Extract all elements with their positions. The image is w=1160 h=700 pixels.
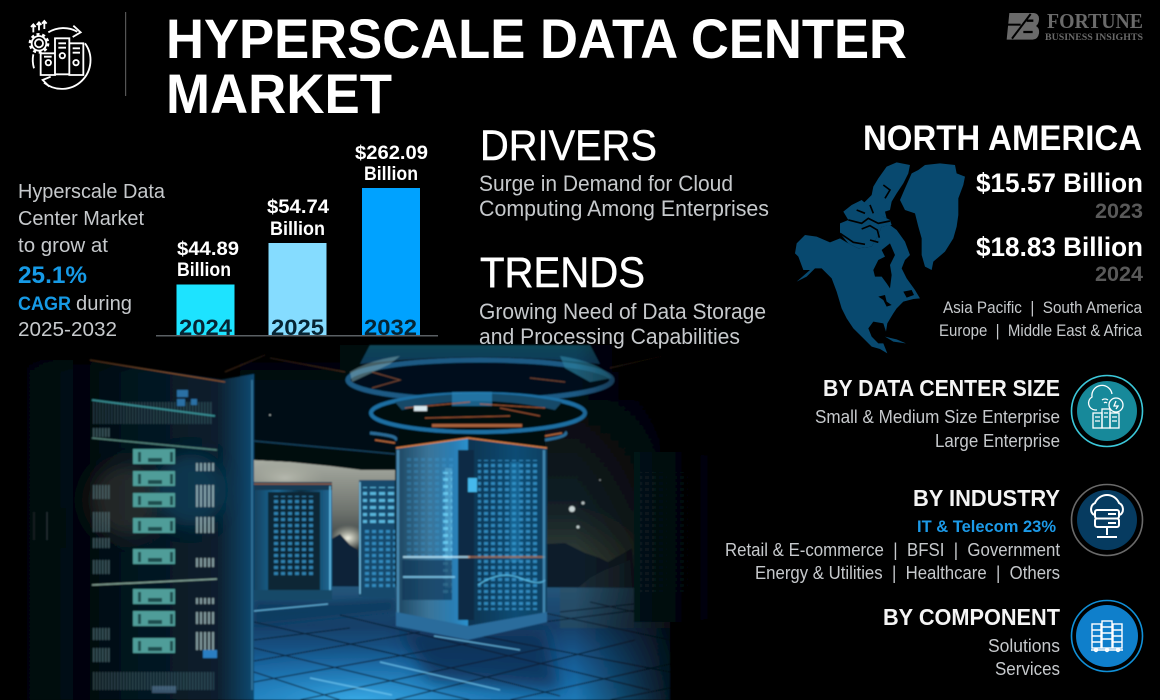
drivers: Surge in Demand for Cloud bbox=[479, 171, 733, 196]
by industry: Retail & E-commerce | BFSI | Government bbox=[725, 540, 1060, 560]
drivers bbox=[479, 122, 769, 221]
stars bbox=[269, 414, 601, 528]
CAGR text block: CAGR bbox=[18, 294, 71, 315]
back rack right bbox=[359, 480, 395, 597]
bar 2024: Billion bbox=[177, 260, 231, 281]
CAGR text block: Center Market bbox=[18, 207, 144, 230]
display cluster bbox=[177, 390, 197, 406]
CAGR text block: Hyperscale Data bbox=[18, 180, 166, 203]
icon: cloud server bbox=[1072, 484, 1142, 556]
bar chart bbox=[156, 143, 438, 340]
trends: TRENDS bbox=[480, 249, 645, 297]
by industry bbox=[725, 485, 1060, 583]
by data center size bbox=[815, 375, 1060, 451]
North America stats bbox=[863, 119, 1143, 340]
logo: Fortune Business Insights bbox=[1005, 9, 1143, 43]
bar 2024: 2024 bbox=[179, 315, 233, 340]
reflection under column bbox=[400, 630, 560, 690]
ceiling band bbox=[254, 441, 395, 470]
data center scene image bbox=[0, 340, 800, 700]
trends bbox=[479, 249, 766, 349]
Ellesmere bbox=[862, 162, 910, 218]
by industry: IT & Telecom 23% bbox=[917, 517, 1056, 536]
mainland bbox=[795, 225, 920, 353]
drivers: DRIVERS bbox=[480, 122, 657, 170]
green display panels bbox=[133, 449, 175, 653]
title bbox=[166, 7, 907, 125]
CAGR text block bbox=[18, 180, 166, 341]
map: North America bbox=[795, 162, 965, 353]
North America stats: $15.57 Billion bbox=[976, 168, 1143, 198]
bar 2032 bbox=[355, 143, 428, 340]
arctic islands bbox=[840, 200, 892, 248]
by data center size: BY DATA CENTER SIZE bbox=[823, 375, 1060, 401]
CAGR text block: 25.1% bbox=[18, 262, 87, 289]
header divider bbox=[125, 12, 126, 96]
by data center size: Large Enterprise bbox=[935, 431, 1060, 451]
by component bbox=[883, 604, 1060, 679]
bar 2032: Billion bbox=[364, 164, 418, 185]
by data center size: Small & Medium Size Enterprise bbox=[815, 407, 1060, 427]
logo: Fortune Business Insights: BUSINESS INSIGHTS bbox=[1045, 33, 1143, 43]
header icon: servers with gear and cycle arrows bbox=[30, 21, 91, 89]
bar 2025 bbox=[267, 197, 329, 340]
right faded rack bbox=[634, 452, 764, 622]
ceiling lines bbox=[225, 352, 680, 372]
ceiling ring device bbox=[348, 345, 612, 443]
by industry: BY INDUSTRY bbox=[913, 485, 1060, 511]
bar 2032: 2032 bbox=[364, 315, 417, 340]
Greenland bbox=[900, 163, 965, 270]
bar 2025: $54.74 bbox=[267, 197, 329, 218]
bar 2032: $262.09 bbox=[355, 143, 428, 164]
by component: BY COMPONENT bbox=[883, 604, 1060, 630]
icon: cloud servers bbox=[1072, 376, 1142, 446]
bar 2025: Billion bbox=[270, 219, 325, 240]
by component: Solutions bbox=[988, 636, 1060, 656]
North America stats: Asia Pacific | South America bbox=[943, 299, 1143, 317]
floor tiles bbox=[254, 600, 670, 700]
North America stats: NORTH AMERICA bbox=[863, 119, 1142, 158]
title: MARKET bbox=[166, 62, 392, 125]
North America stats: 2023 bbox=[1095, 200, 1143, 223]
mountains bbox=[330, 534, 362, 590]
vents beside displays bbox=[92, 428, 110, 662]
arctic channels bbox=[840, 185, 890, 244]
bar 2024: $44.89 bbox=[177, 239, 239, 260]
Cuba bbox=[885, 337, 906, 343]
trends: Growing Need of Data Storage bbox=[479, 299, 766, 324]
title: HYPERSCALE DATA CENTER bbox=[166, 7, 907, 70]
bar 2025: 2025 bbox=[271, 315, 324, 340]
North America stats: $18.83 Billion bbox=[976, 232, 1143, 262]
drivers: Computing Among Enterprises bbox=[479, 196, 769, 221]
floor bbox=[254, 586, 670, 700]
CAGR text block: 2025-2032 bbox=[18, 318, 117, 341]
central column bbox=[396, 438, 547, 640]
bar 2024 bbox=[176, 239, 239, 340]
North America stats: Europe | Middle East & Africa bbox=[939, 322, 1143, 340]
logo: Fortune Business Insights: FORTUNE bbox=[1047, 9, 1143, 33]
clouds through window bbox=[254, 460, 395, 590]
CAGR text block: to grow at bbox=[18, 234, 108, 257]
by component: Services bbox=[995, 659, 1060, 679]
back rack left bbox=[254, 482, 332, 600]
left rack bbox=[27, 360, 254, 700]
by industry: Energy & Utilities | Healthcare | Others bbox=[755, 563, 1060, 583]
icon: server network bbox=[1072, 600, 1142, 672]
CAGR text block: during bbox=[76, 292, 132, 315]
trends: and Processing Capabilities bbox=[479, 324, 740, 349]
North America stats: 2024 bbox=[1095, 263, 1143, 286]
